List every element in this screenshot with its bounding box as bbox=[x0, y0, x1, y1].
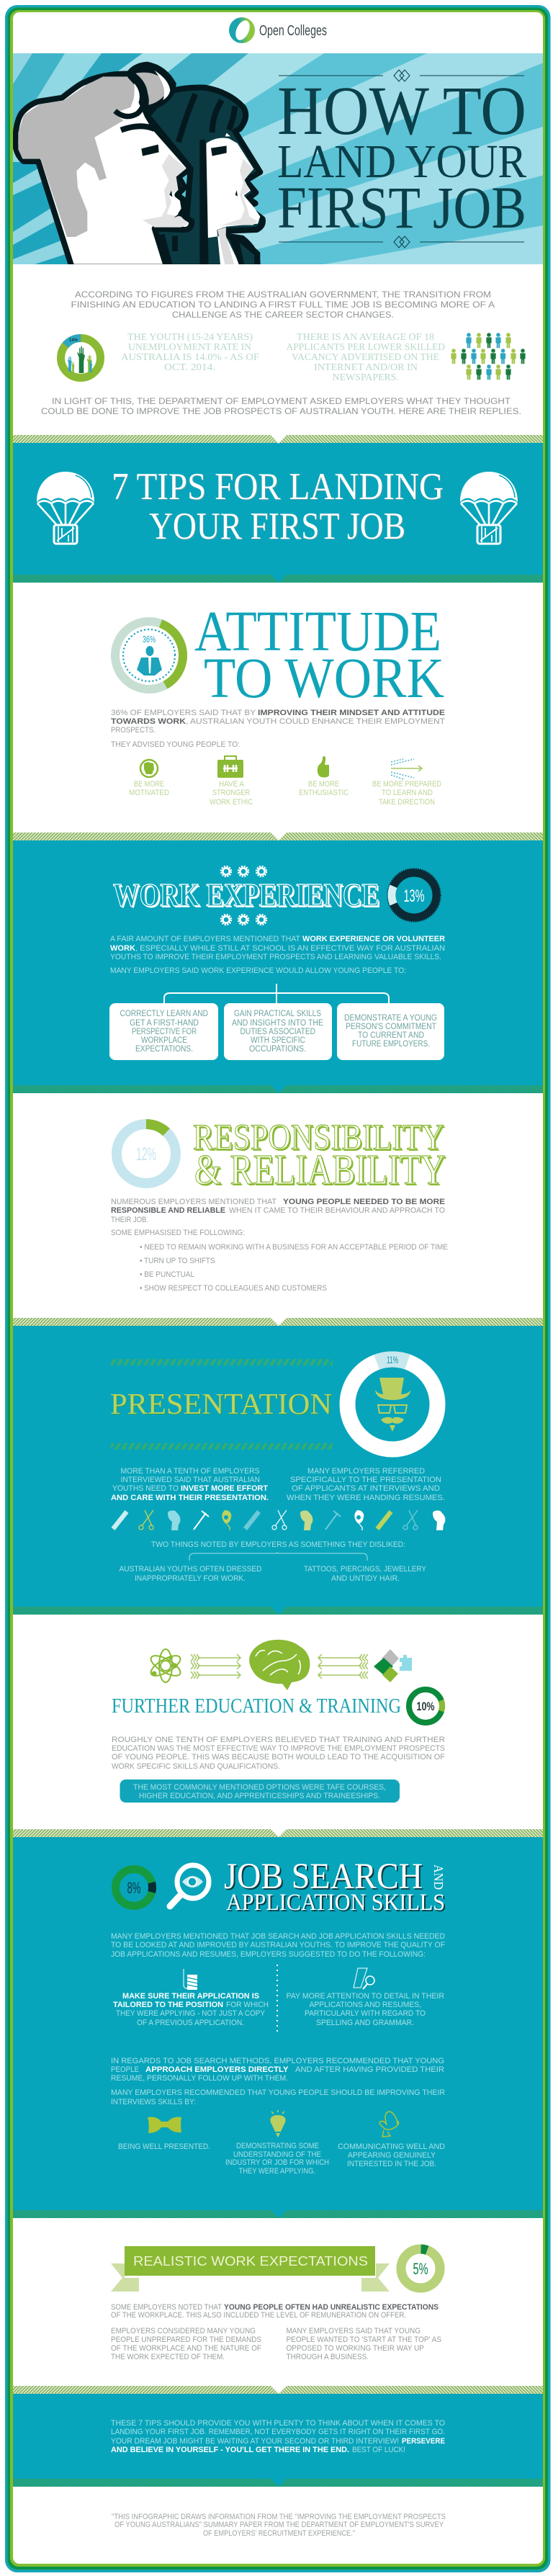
bullet list: • SHOW RESPECT TO COLLEAGUES AND CUSTOMERS bbox=[140, 1284, 327, 1293]
tip: be more prepared to learn and take direction bbox=[372, 759, 441, 807]
tip: communicating well: APPEARING GENUINELY bbox=[348, 2151, 436, 2160]
logo: Open Colleges bbox=[229, 17, 327, 43]
body text bbox=[111, 1932, 445, 1959]
tip: attention to detail: SPELLING AND GRAMMAR. bbox=[316, 2019, 414, 2027]
bottom hatched band bbox=[13, 2479, 543, 2487]
box: demonstrate commitment: DEMONSTRATE A YOUNG bbox=[344, 1014, 437, 1023]
top hatched band bbox=[13, 435, 543, 444]
closing text: YOUR DREAM JOB MIGHT BE WAITING AT YOUR SECOND OR THIRD INTERVIEW! bbox=[111, 2437, 399, 2446]
donut: youth unemployment 14%: 14% bbox=[69, 338, 78, 343]
tip: be more motivated bbox=[129, 760, 169, 797]
heading: 7 tips for landing your first job: YOUR FIRST JOB bbox=[149, 506, 405, 547]
callout: options: HIGHER EDUCATION, AND APPRENTICESHIPS AND TRAINEESHIPS. bbox=[139, 1792, 380, 1800]
bracket bbox=[189, 1552, 367, 1561]
tip: tailored application: FOR WHICH bbox=[226, 2001, 269, 2009]
body text: , ESPECIALLY WHILE STILL AT SCHOOL IS AN EFFECTIVE WAY FOR AUSTRALIAN bbox=[135, 944, 445, 953]
donut: 36%: 36% bbox=[143, 634, 156, 645]
tip: well presented bbox=[118, 2117, 210, 2151]
tip: attention to detail bbox=[287, 1992, 444, 2027]
body text: JOB APPLICATIONS AND RESUMES, EMPLOYERS SUGGESTED TO DO THE FOLLOWING: bbox=[111, 1950, 426, 1959]
panel: responsibility and reliability bbox=[111, 1118, 448, 1293]
intro text: FINISHING AN EDUCATION TO LANDING A FIRST FULL TIME JOB IS BECOMING MORE OF A bbox=[71, 300, 495, 310]
title: How to land your first job: LAND YOUR bbox=[277, 135, 526, 188]
heading: work experience: WORK EXPERIENCE bbox=[114, 879, 381, 915]
tip: tailored application: MAKE SURE THEIR APPLICATION IS bbox=[122, 1992, 259, 2001]
columns text left: YOUTHS NEED TO bbox=[112, 1484, 179, 1493]
closing text: THESE 7 TIPS SHOULD PROVIDE YOU WITH PLENTY TO THINK ABOUT WHEN IT COMES TO bbox=[111, 2419, 445, 2428]
body text: YOUTHS TO IMPROVE THEIR EMPLOYMENT PROSPECTS AND LEARNING VALUABLE SKILLS. bbox=[110, 953, 441, 961]
stat: applicants per vacancy: APPLICANTS PER LOWER SKILLED bbox=[287, 341, 445, 352]
title decoration top bbox=[279, 70, 524, 81]
columns text right bbox=[287, 1467, 445, 1502]
dislike: tattoos: AND UNTIDY HAIR. bbox=[331, 1574, 400, 1583]
column text left bbox=[111, 2327, 261, 2361]
column text right: MANY EMPLOYERS SAID THAT YOUNG bbox=[287, 2327, 421, 2335]
icon group: 18 people bbox=[451, 333, 526, 380]
columns text right: MANY EMPLOYERS REFERRED bbox=[307, 1467, 425, 1476]
body text: EDUCATION WAS THE MOST EFFECTIVE WAY TO IMPROVE THE EMPLOYMENT PROSPECTS bbox=[112, 1744, 445, 1753]
column text right: OPPOSED TO WORKING THEIR WAY UP bbox=[287, 2344, 424, 2353]
body text: NUMEROUS EMPLOYERS MENTIONED THAT bbox=[111, 1198, 276, 1206]
intro closing text: COULD BE DONE TO IMPROVE THE JOB PROSPECTS OF AUSTRALIAN YOUTH. HERE ARE THEIR REPLIES. bbox=[41, 406, 521, 416]
columns text right: WHEN THEY WERE HANDING RESUMES. bbox=[287, 1494, 445, 1502]
title: How to land your first job: HOW TO bbox=[277, 72, 526, 149]
text: job search methods: INTERVIEWS SKILLS BY: bbox=[111, 2098, 196, 2106]
tip: have a stronger work ethic: STRONGER bbox=[212, 789, 250, 797]
heading: job search and application skills: APPLICATION SKILLS bbox=[228, 1891, 446, 1917]
column text right bbox=[287, 2327, 441, 2361]
text: job search methods: IN REGARDS TO JOB SEARCH METHODS, EMPLOYERS RECOMMENDED THAT YOUNG bbox=[111, 2057, 444, 2065]
top hatched band bbox=[13, 1318, 543, 1326]
text: job search methods: AND AFTER HAVING PROVIDED THEIR bbox=[295, 2065, 444, 2074]
source note: "THIS INFOGRAPHIC DRAWS INFORMATION FROM THE "IMPROVING THE EMPLOYMENT PROSPECTS bbox=[112, 2513, 446, 2521]
panel: hero banner bbox=[13, 53, 547, 267]
columns text left: INVEST MORE EFFORT bbox=[181, 1484, 268, 1493]
arrows left bbox=[191, 1654, 240, 1679]
arrows right bbox=[318, 1654, 368, 1679]
box: correctly learn: PERSPECTIVE FOR bbox=[132, 1028, 197, 1036]
tip: be more motivated: MOTIVATED bbox=[129, 789, 169, 797]
body text: WHEN IT CAME TO THEIR BEHAVIOUR AND APPROACH TO bbox=[229, 1206, 445, 1215]
donut: 5% bbox=[400, 2248, 441, 2289]
panel: further education and training bbox=[112, 1640, 446, 1803]
intro closing text: IN LIGHT OF THIS, THE DEPARTMENT OF EMPLOYMENT ASKED EMPLOYERS WHAT THEY THOUGHT bbox=[52, 396, 511, 406]
panel: 7 tips banner bbox=[13, 435, 543, 583]
icons: gears top bbox=[221, 866, 266, 876]
tip: be more enthusiastic: ENTHUSIASTIC bbox=[299, 789, 349, 797]
bottom hatched band bbox=[13, 575, 543, 583]
heading: attitude to work bbox=[194, 601, 444, 710]
closing text bbox=[111, 2419, 445, 2454]
ribbon heading: REALISTIC WORK EXPECTATIONS bbox=[133, 2254, 368, 2268]
tip: well presented: BEING WELL PRESENTED. bbox=[118, 2142, 210, 2151]
illustration: two head profiles bbox=[15, 62, 263, 267]
text: job search methods: MANY EMPLOYERS RECOMMENDED THAT YOUNG PEOPLE SHOULD BE IMPROVING THEIR bbox=[111, 2088, 445, 2097]
icon: puzzle bbox=[374, 1649, 412, 1682]
body text: WORK bbox=[110, 944, 135, 953]
box: correctly learn: WORKPLACE bbox=[141, 1036, 187, 1045]
stat: applicants per vacancy bbox=[287, 331, 445, 382]
column text right: PEOPLE WANTED TO 'START AT THE TOP' AS bbox=[287, 2335, 441, 2344]
box: correctly learn bbox=[109, 1003, 218, 1060]
body text: ROUGHLY ONE TENTH OF EMPLOYERS BELIEVED THAT TRAINING AND FURTHER bbox=[112, 1736, 445, 1744]
heading: 7 tips for landing your first job: YOUR FIRST JOB bbox=[150, 506, 406, 548]
body text: OF THE WORKPLACE. THIS ALSO INCLUDED THE LEVEL OF REMUNERATION ON OFFER. bbox=[111, 2311, 406, 2320]
bottom hatched band bbox=[13, 2210, 543, 2218]
body text: WORK SPECIFIC SKILLS AND QUALIFICATIONS. bbox=[112, 1762, 280, 1771]
tip: communicating well bbox=[338, 2111, 445, 2168]
body text: A FAIR AMOUNT OF EMPLOYERS MENTIONED THAT bbox=[110, 935, 300, 943]
body text: RESPONSIBLE AND RELIABLE bbox=[111, 1206, 225, 1215]
decorative hatched bar top bbox=[111, 1359, 333, 1365]
box: gain practical skills: WITH SPECIFIC bbox=[251, 1036, 305, 1045]
box: gain practical skills: AND INSIGHTS INTO THE bbox=[232, 1019, 323, 1028]
donut: 13%: 13% bbox=[403, 887, 425, 906]
heading: 7 tips for landing your first job: 7 TIPS FOR LANDING bbox=[112, 467, 444, 508]
body text: THEIR JOB. bbox=[111, 1216, 148, 1224]
top hatched band bbox=[13, 1829, 543, 1837]
tip: demonstrating understanding: DEMONSTRATING SOME bbox=[236, 2142, 319, 2150]
decorative hatched bar bottom bbox=[111, 1443, 333, 1450]
donut: 8% bbox=[112, 1865, 156, 1910]
column text left: OF THE WORKPLACE AND THE NATURE OF bbox=[111, 2344, 261, 2353]
heading: responsibility & reliability bbox=[193, 1118, 447, 1195]
box: correctly learn: GET A FIRST-HAND bbox=[130, 1019, 199, 1028]
columns text right: OF APPLICANTS AT INTERVIEWS AND bbox=[292, 1484, 440, 1493]
column text left: EMPLOYERS CONSIDERED MANY YOUNG bbox=[111, 2327, 256, 2335]
tip: tailored application bbox=[113, 1992, 269, 2027]
bullet list: • BE PUNCTUAL bbox=[140, 1270, 194, 1279]
body text: TO BE LOOKED AT AND IMPROVED BY AUSTRALIAN YOUTHS. TO IMPROVE THE QUALITY OF bbox=[111, 1941, 445, 1949]
heading: work experience: WORK EXPERIENCE bbox=[113, 877, 379, 913]
body text bbox=[111, 709, 445, 749]
body text: SOME EMPLOYERS NOTED THAT bbox=[111, 2303, 222, 2312]
left head with grey hair and bun bbox=[15, 62, 192, 267]
icon: brain bbox=[249, 1640, 310, 1690]
top hatched band bbox=[13, 2386, 543, 2394]
heading: job search and application skills: JOB SEARCH bbox=[225, 1858, 424, 1898]
box: demonstrate commitment: FUTURE EMPLOYERS. bbox=[352, 1040, 430, 1049]
dislikes heading: TWO THINGS NOTED BY EMPLOYERS AS SOMETHING THEY DISLIKED: bbox=[151, 1540, 405, 1549]
panel: closing message bbox=[13, 2386, 543, 2487]
panel: presentation bbox=[13, 1318, 543, 1615]
stat: youth unemployment rate: UNEMPLOYMENT RATE IN bbox=[128, 341, 251, 352]
tip: demonstrating understanding: THEY WERE APPLYING. bbox=[239, 2167, 315, 2176]
text: job search methods bbox=[111, 2057, 445, 2106]
tip: demonstrating understanding: INDUSTRY OR JOB FOR WHICH bbox=[225, 2158, 329, 2167]
icon row: grooming tools bbox=[111, 1510, 445, 1530]
body text: MANY EMPLOYERS MENTIONED THAT JOB SEARCH AND JOB APPLICATION SKILLS NEEDED bbox=[111, 1932, 445, 1941]
panel: attitude to work bbox=[106, 601, 445, 807]
tip: have a stronger work ethic: HAVE A bbox=[219, 780, 245, 789]
tip: have a stronger work ethic bbox=[210, 756, 253, 807]
columns text left: AND CARE WITH THEIR PRESENTATION. bbox=[111, 1494, 269, 1502]
callout: options bbox=[120, 1780, 400, 1803]
donut: 12%: 12% bbox=[136, 1144, 156, 1164]
heading: job search and application skills: JOB SEARCH bbox=[224, 1857, 423, 1897]
ribbon heading bbox=[111, 2246, 390, 2292]
heading: presentation: PRESENTATION bbox=[111, 1388, 333, 1421]
body text bbox=[111, 1198, 445, 1237]
panel: job search and application skills bbox=[13, 1829, 543, 2218]
box: gain practical skills: OCCUPATIONS. bbox=[249, 1045, 306, 1054]
heading: job search and application skills: APPLICATION SKILLS bbox=[226, 1890, 445, 1916]
icon: attention to detail bbox=[354, 1968, 374, 1989]
tip: be more prepared to learn and take direction: TAKE DIRECTION bbox=[379, 798, 435, 807]
body text: SOME EMPHASISED THE FOLLOWING: bbox=[111, 1229, 245, 1237]
icon: magnifier with eye bbox=[170, 1865, 209, 1906]
donut: 13% bbox=[385, 866, 444, 925]
heading: responsibility & reliability: RESPONSIBILITY bbox=[194, 1119, 446, 1159]
column text left: PEOPLE UNPREPARED FOR THE DEMANDS bbox=[111, 2335, 261, 2344]
heading: 7 tips for landing your first job bbox=[112, 466, 444, 548]
heading: responsibility & reliability: RESPONSIBILITY bbox=[193, 1118, 444, 1158]
icon: parachute left bbox=[37, 472, 94, 544]
dislike: tattoos: TATTOOS, PIERCINGS, JEWELLERY bbox=[304, 1565, 427, 1574]
body text: YOUNG PEOPLE NEEDED TO BE MORE bbox=[283, 1198, 445, 1206]
heading: attitude to work: ATTITUDE bbox=[194, 601, 441, 663]
columns text left: INTERVIEWED SAID THAT AUSTRALIAN bbox=[121, 1476, 260, 1484]
closing text: PERSEVERE bbox=[402, 2437, 445, 2446]
bullet list: • TURN UP TO SHIFTS bbox=[140, 1257, 215, 1265]
stat: applicants per vacancy: NEWSPAPERS. bbox=[333, 372, 399, 382]
dislike: dress bbox=[120, 1565, 262, 1583]
intro text: ACCORDING TO FIGURES FROM THE AUSTRALIAN GOVERNMENT, THE TRANSITION FROM bbox=[75, 290, 491, 300]
source note: OF YOUNG AUSTRALIANS" SUMMARY PAPER FROM THE DEPARTMENT OF EMPLOYMENT'S SURVEY bbox=[114, 2521, 444, 2529]
source note: OF EMPLOYERS' RECRUITMENT EXPERIENCE." bbox=[203, 2529, 355, 2538]
heading: job search and application skills bbox=[224, 1857, 446, 1917]
icon: thread spool bbox=[184, 1969, 197, 1990]
tip: demonstrating understanding: UNDERSTANDING OF THE bbox=[233, 2150, 321, 2159]
panel: work experience bbox=[13, 833, 543, 1093]
stat: applicants per vacancy: VACANCY ADVERTISED ON THE bbox=[292, 351, 439, 362]
tip: attention to detail: APPLICATIONS AND RESUMES, bbox=[310, 2001, 421, 2009]
body text: YOUNG PEOPLE OFTEN HAD UNREALISTIC EXPECTATIONS bbox=[224, 2303, 439, 2312]
donut: 8%: 8% bbox=[127, 1879, 141, 1897]
tip: be more prepared to learn and take direction: BE MORE PREPARED bbox=[372, 780, 441, 789]
body text: PROSPECTS. bbox=[111, 726, 156, 735]
donut: 10%: 10% bbox=[416, 1700, 435, 1713]
heading: 7 tips for landing your first job: 7 TIPS FOR LANDING bbox=[112, 466, 444, 508]
box: correctly learn: EXPECTATIONS. bbox=[135, 1045, 193, 1054]
panel: realistic work expectations bbox=[111, 2246, 441, 2361]
stat: youth unemployment rate: THE YOUTH (15-24 YEARS) bbox=[127, 331, 253, 342]
box: gain practical skills: DUTIES ASSOCIATED bbox=[240, 1028, 315, 1036]
title: How to land your first job bbox=[277, 72, 526, 241]
tip: attention to detail: PAY MORE ATTENTION TO DETAIL IN THEIR bbox=[287, 1992, 444, 2001]
box: gain practical skills bbox=[224, 1003, 332, 1060]
dislike: dress: AUSTRALIAN YOUTHS OFTEN DRESSED bbox=[120, 1565, 262, 1574]
heading: presentation: PRESENTATION bbox=[110, 1387, 332, 1420]
tip: be more enthusiastic: BE MORE bbox=[308, 780, 339, 789]
text: job search methods: APPROACH EMPLOYERS DIRECTLY bbox=[145, 2065, 289, 2074]
columns text left bbox=[111, 1467, 269, 1502]
heading: further education & training: FURTHER EDUCATION & TRAINING bbox=[112, 1695, 401, 1718]
donut: 10% bbox=[405, 1685, 446, 1727]
box: demonstrate commitment: PERSON'S COMMITMENT bbox=[346, 1023, 436, 1031]
dislike: tattoos bbox=[304, 1565, 427, 1583]
top hatched band bbox=[13, 833, 543, 840]
columns text left: MORE THAN A TENTH OF EMPLOYERS bbox=[121, 1467, 259, 1476]
icon: parachute right bbox=[460, 472, 518, 544]
stat: youth unemployment rate: OCT. 2014. bbox=[164, 362, 215, 372]
hero sunburst background bbox=[13, 53, 547, 264]
tip: be more motivated: BE MORE bbox=[134, 780, 164, 789]
intro text: CHALLENGE AS THE CAREER SECTOR CHANGES. bbox=[172, 310, 394, 320]
connector bracket bbox=[164, 984, 389, 1003]
stat: applicants per vacancy: THERE IS AN AVERAGE OF 18 bbox=[297, 331, 434, 342]
tip: tailored application: THEY WERE APPLYING - NOT JUST A COPY bbox=[116, 2009, 266, 2018]
box: demonstrate commitment: TO CURRENT AND bbox=[358, 1031, 424, 1040]
tip: demonstrating understanding bbox=[225, 2110, 329, 2176]
source note bbox=[112, 2513, 446, 2538]
tip: be more prepared to learn and take direction: TO LEARN AND bbox=[382, 789, 433, 797]
heading: attitude to work: TO WORK bbox=[204, 647, 444, 710]
tip: have a stronger work ethic: WORK ETHIC bbox=[210, 798, 253, 807]
tip: attention to detail: PARTICULARLY WITH REGARD TO bbox=[305, 2009, 426, 2018]
title decoration bottom bbox=[279, 236, 524, 248]
body text: TOWARDS WORK bbox=[111, 717, 186, 726]
heading: responsibility & reliability: & RELIABILITY bbox=[194, 1146, 446, 1193]
stat: youth unemployment rate: AUSTRALIA IS 14.0% - AS OF bbox=[121, 351, 260, 362]
bullet list bbox=[140, 1243, 448, 1293]
logo: Open Colleges: Open Colleges bbox=[259, 23, 327, 39]
stat: youth unemployment rate bbox=[121, 331, 260, 372]
text: job search methods: PEOPLE bbox=[111, 2065, 139, 2074]
body text: 36% OF EMPLOYERS SAID THAT BY bbox=[111, 709, 256, 717]
bullet list: • NEED TO REMAIN WORKING WITH A BUSINESS FOR AN ACCEPTABLE PERIOD OF TIME bbox=[140, 1243, 448, 1252]
box: demonstrate commitment bbox=[337, 1003, 444, 1060]
body text: IMPROVING THEIR MINDSET AND ATTITUDE bbox=[258, 709, 445, 717]
right head with dark hair bbox=[148, 88, 263, 267]
body text: MANY EMPLOYERS SAID WORK EXPERIENCE WOULD ALLOW YOUNG PEOPLE TO: bbox=[110, 966, 406, 975]
bottom hatched band bbox=[13, 1607, 543, 1615]
tip: communicating well: INTERESTED IN THE JOB. bbox=[347, 2160, 436, 2168]
title: How to land your first job: FIRST JOB bbox=[277, 174, 526, 241]
heading: job search and application skills: AND bbox=[431, 1864, 446, 1890]
callout: options: THE MOST COMMONLY MENTIONED OPTIONS WERE TAFE COURSES, bbox=[133, 1783, 386, 1792]
column text right: THROUGH A BUSINESS. bbox=[287, 2353, 369, 2361]
dotted divider bbox=[276, 1965, 278, 2034]
body text: , AUSTRALIAN YOUTH COULD ENHANCE THEIR EMPLOYMENT bbox=[186, 717, 445, 726]
bottom hatched band bbox=[13, 1085, 543, 1093]
body text: THEY ADVISED YOUNG PEOPLE TO: bbox=[111, 740, 240, 749]
body text bbox=[111, 2303, 439, 2320]
heading: responsibility & reliability: & RELIABILITY bbox=[196, 1147, 447, 1195]
donut: 12% bbox=[117, 1124, 176, 1183]
closing text: LANDING YOUR FIRST JOB. REMEMBER, NOT EVERYBODY GETS IT RIGHT ON THEIR FIRST GO. bbox=[111, 2428, 445, 2436]
tip: tailored application: OF A PREVIOUS APPLICATION. bbox=[137, 2019, 244, 2027]
donut: 11% with gentleman icon: 11% bbox=[387, 1354, 398, 1365]
columns text right: SPECIFICALLY TO THE PRESENTATION bbox=[290, 1476, 441, 1484]
intro text bbox=[71, 290, 495, 320]
intro closing text bbox=[41, 396, 521, 416]
closing text: BEST OF LUCK! bbox=[352, 2446, 405, 2454]
body text bbox=[112, 1736, 445, 1771]
body text: OF YOUNG PEOPLE. THIS WAS BECAUSE BOTH WOULD LEAD TO THE ACQUISITION OF bbox=[112, 1753, 445, 1762]
box: correctly learn: CORRECTLY LEARN AND bbox=[120, 1010, 208, 1018]
box: gain practical skills: GAIN PRACTICAL SKILLS bbox=[234, 1010, 321, 1018]
icons: gears bottom bbox=[221, 915, 266, 925]
tip: tailored application: TAILORED TO THE POSITION bbox=[113, 2001, 223, 2009]
body text: WORK EXPERIENCE OR VOLUNTEER bbox=[302, 935, 445, 943]
text: job search methods: RESUME, PERSONALLY FOLLOW UP WITH THEM. bbox=[111, 2074, 288, 2083]
donut: 11% with gentleman icon bbox=[335, 1347, 450, 1462]
column text left: THE WORK EXPECTED OF THEM. bbox=[111, 2353, 225, 2361]
donut: 36% bbox=[106, 612, 192, 699]
donut: youth unemployment 14% bbox=[53, 330, 109, 386]
tip: be more enthusiastic bbox=[299, 756, 349, 797]
tip: communicating well: COMMUNICATING WELL AND bbox=[338, 2142, 445, 2151]
icon: atom bbox=[148, 1649, 183, 1682]
donut: 5%: 5% bbox=[413, 2260, 428, 2278]
body text bbox=[110, 935, 445, 975]
stat: applicants per vacancy: INTERNET AND/OR IN bbox=[314, 362, 418, 372]
closing text: AND BELIEVE IN YOURSELF - YOU'LL GET THERE IN THE END. bbox=[111, 2446, 349, 2454]
dislike: dress: INAPPROPRIATELY FOR WORK. bbox=[135, 1574, 246, 1583]
